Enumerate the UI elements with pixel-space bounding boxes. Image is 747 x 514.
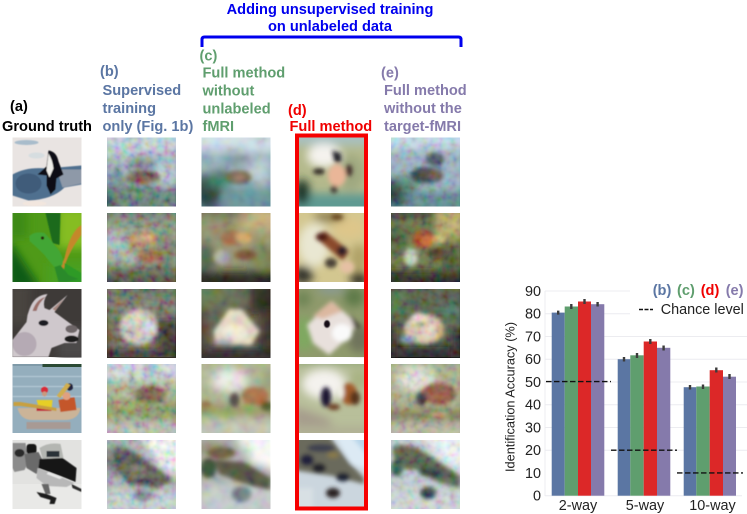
column label: b supervised training: Supervised xyxy=(102,83,181,99)
column label: e without target fMRI: (e) xyxy=(381,66,399,82)
column label: c without unlabeled fMRI: Full method xyxy=(202,66,285,82)
image: snowmobile ground truth xyxy=(12,440,82,509)
image: llama reconstruction full method xyxy=(299,289,364,358)
image: llama ground truth xyxy=(12,289,82,358)
image: llama supervised reconstruction xyxy=(107,289,176,358)
column label: c without unlabeled fMRI: unlabeled xyxy=(202,102,271,118)
y axis tick labels: 30 xyxy=(525,420,541,436)
legend: (b) xyxy=(653,283,671,299)
image: orca reconstruction without unlabeled fMRI xyxy=(202,138,270,206)
x axis labels: 10-way xyxy=(689,498,736,514)
column label: b supervised training: only (Fig. 1b) xyxy=(102,119,193,135)
y axis tick labels: 0 xyxy=(533,489,541,505)
image: orca reconstruction without target fMRI xyxy=(391,138,460,206)
x axis labels: 2-way xyxy=(559,498,598,514)
column label: a ground truth xyxy=(2,99,92,135)
legend background mask xyxy=(630,285,747,318)
y axis title: Identification Accuracy (%) xyxy=(502,322,518,472)
legend: (e) xyxy=(726,283,744,299)
heading: adding unsupervised training: Adding unsupervised training xyxy=(227,2,433,18)
chart gridlines and axes xyxy=(545,291,747,496)
image: iguana reconstruction full method xyxy=(299,213,364,282)
column label: c without unlabeled fMRI: (c) xyxy=(200,48,217,64)
column label: d full method: Full method xyxy=(290,119,372,135)
column label: a ground truth: (a) xyxy=(10,99,28,115)
column label: e without target fMRI: target-fMRI xyxy=(384,119,461,135)
image: snowmobile reconstruction without target fMRI xyxy=(391,440,460,509)
column label: e without target fMRI: Full method xyxy=(384,83,467,99)
bar chart: identification accuracy xyxy=(502,283,747,514)
legend: Chance level xyxy=(661,302,744,318)
image: iguana supervised reconstruction xyxy=(107,213,176,282)
y axis tick labels: 80 xyxy=(525,307,541,323)
highlight frame around full method column xyxy=(297,136,366,508)
x axis labels xyxy=(559,498,736,514)
image: kayak reconstruction without unlabeled fMRI xyxy=(202,364,270,433)
y axis tick labels: 60 xyxy=(525,352,541,368)
y axis tick labels xyxy=(525,284,541,505)
heading: adding unsupervised training: on unlabeled data xyxy=(268,19,393,35)
image: orca supervised reconstruction xyxy=(107,138,176,206)
bracket over columns c to e xyxy=(202,37,461,47)
image: orca reconstruction full method xyxy=(299,138,364,206)
image: iguana reconstruction without unlabeled fMRI xyxy=(202,213,270,282)
image: snowmobile reconstruction without unlabeled fMRI xyxy=(202,440,270,509)
column label: b supervised training: (b) xyxy=(100,64,119,80)
image: snowmobile reconstruction full method xyxy=(299,440,364,506)
bars: 5-way xyxy=(618,342,670,496)
image: orca ground truth xyxy=(12,138,82,206)
image: kayak reconstruction full method xyxy=(299,364,364,433)
y axis tick labels: 40 xyxy=(525,398,541,414)
column label: a ground truth: Ground truth xyxy=(2,119,92,135)
column label: c without unlabeled fMRI: without xyxy=(202,84,255,100)
legend: (d) xyxy=(701,283,719,299)
chance level lines xyxy=(546,382,743,473)
y axis tick labels: 70 xyxy=(525,330,541,346)
column label: b supervised training: training xyxy=(102,101,156,117)
column label: e without target fMRI xyxy=(381,66,467,135)
image: kayak reconstruction without target fMRI xyxy=(391,364,460,433)
image: llama reconstruction without target fMRI xyxy=(391,289,460,358)
image: snowmobile supervised reconstruction xyxy=(107,440,176,509)
column label: c without unlabeled fMRI xyxy=(200,48,285,135)
y axis tick labels: 10 xyxy=(525,466,541,482)
column label: c without unlabeled fMRI: fMRI xyxy=(202,119,234,135)
image: kayak supervised reconstruction xyxy=(107,364,176,433)
image: iguana ground truth xyxy=(12,213,82,282)
column label: b supervised training xyxy=(100,64,193,135)
y axis tick labels: 20 xyxy=(525,443,541,459)
column label: e without target fMRI: without the xyxy=(383,101,462,117)
y axis tick labels: 90 xyxy=(525,284,541,300)
legend xyxy=(639,283,744,318)
bars: 10-way xyxy=(684,370,736,496)
x axis labels: 5-way xyxy=(626,498,665,514)
image: kayak ground truth xyxy=(12,364,82,433)
legend: (c) xyxy=(677,283,695,299)
y axis tick labels: 50 xyxy=(525,375,541,391)
bars: 2-way xyxy=(552,302,604,496)
column label: d full method xyxy=(288,103,372,135)
image: llama reconstruction without unlabeled fMRI xyxy=(202,289,270,358)
error bars xyxy=(558,299,730,390)
column label: d full method: (d) xyxy=(288,103,307,119)
image: iguana reconstruction without target fMRI xyxy=(391,213,460,282)
heading: adding unsupervised training xyxy=(227,2,433,35)
